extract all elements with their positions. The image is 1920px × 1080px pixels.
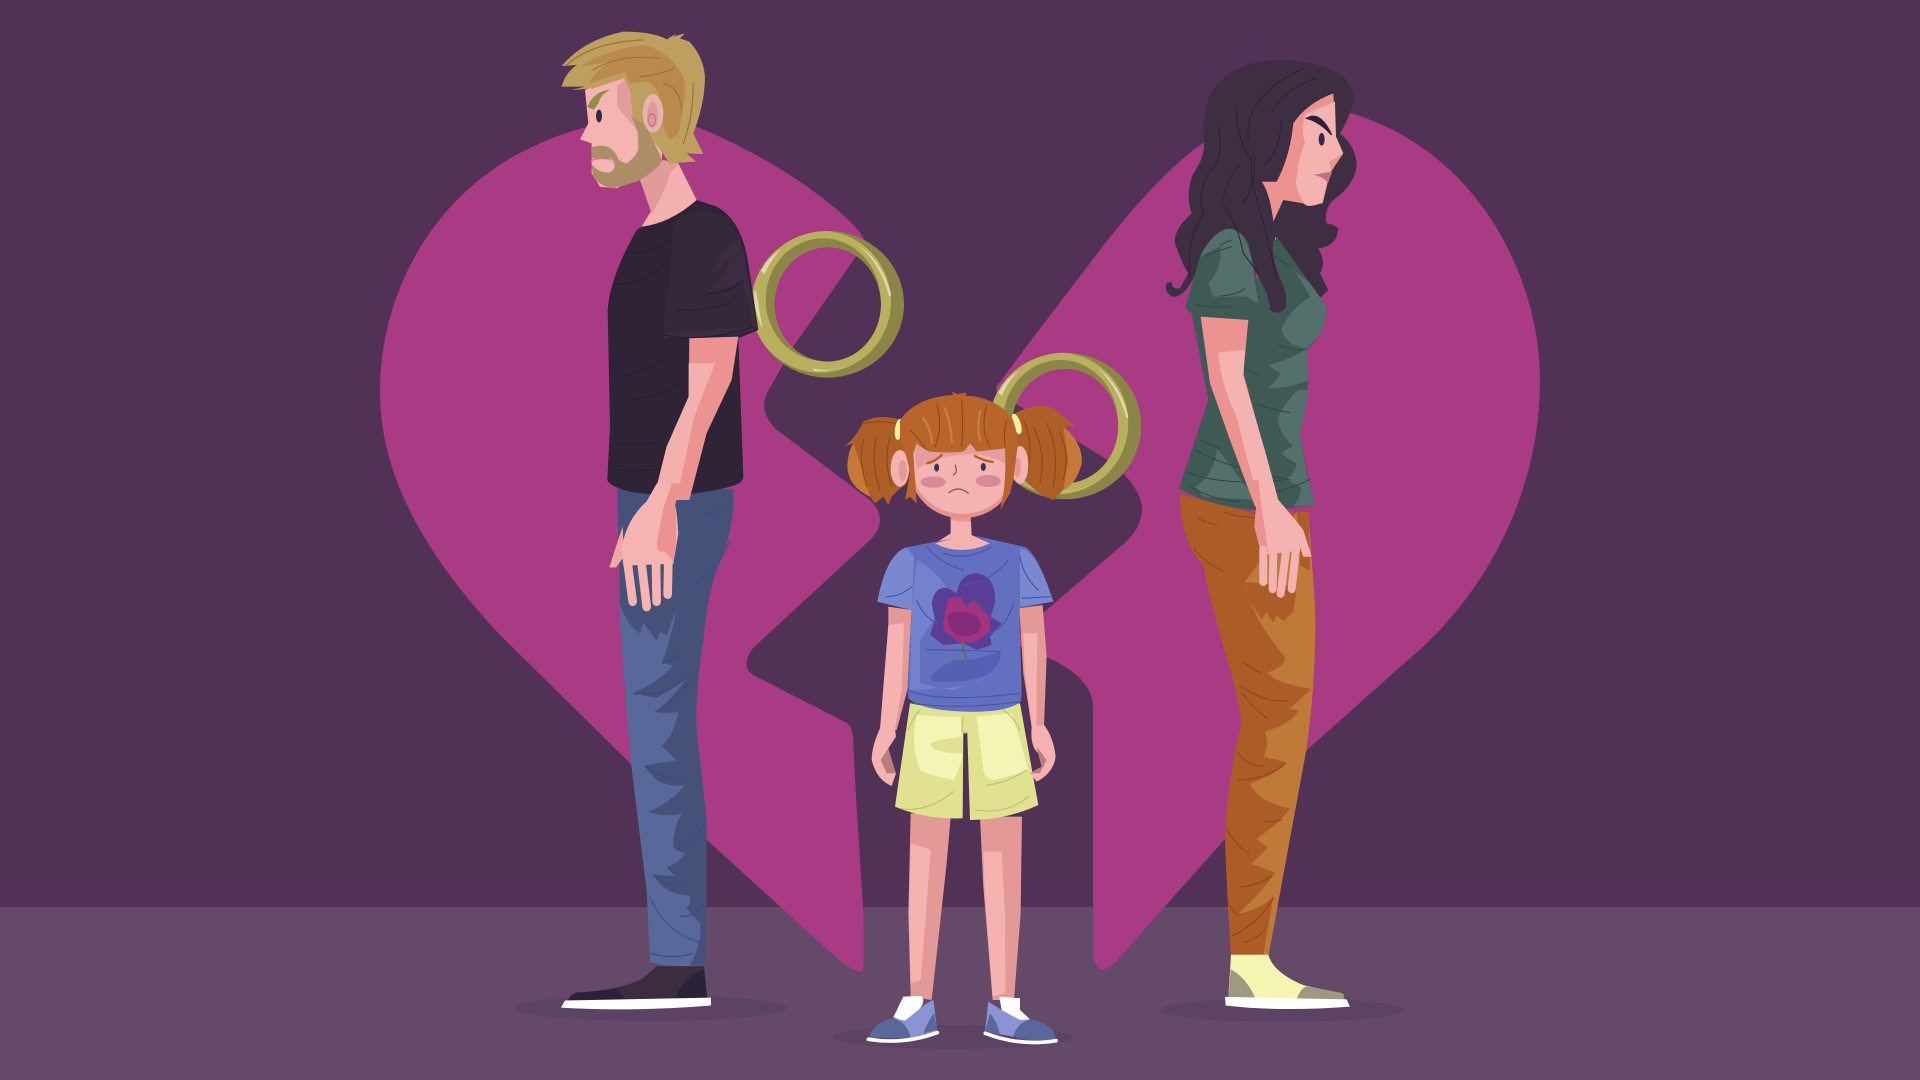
ring highlights xyxy=(754,246,891,371)
ring inner shading xyxy=(766,238,880,361)
woman hair front lock xyxy=(1189,67,1317,313)
woman lips xyxy=(1313,172,1332,183)
child hair xyxy=(900,392,1018,510)
wedding ring left xyxy=(748,228,908,381)
man eye xyxy=(596,110,602,122)
man head xyxy=(562,32,705,188)
man neck xyxy=(640,160,697,227)
man jeans xyxy=(617,489,733,966)
child eyes xyxy=(934,463,986,472)
heart right half xyxy=(996,111,1540,970)
woman eye xyxy=(1319,133,1325,146)
child hair ties xyxy=(894,413,1024,440)
child ears xyxy=(891,446,1028,487)
child head xyxy=(845,392,1082,518)
child neck xyxy=(935,515,990,552)
woman eyebrow xyxy=(1307,116,1332,135)
man shirt xyxy=(607,200,758,495)
man arm xyxy=(653,337,738,500)
child arms xyxy=(880,605,1047,730)
heart left half xyxy=(380,120,880,972)
woman shoe xyxy=(1225,955,1350,1009)
man eyebrow xyxy=(587,90,611,110)
woman neck xyxy=(1262,182,1313,247)
child face xyxy=(912,440,1012,518)
woman face xyxy=(1277,93,1343,206)
ring inner shading xyxy=(1004,360,1118,417)
child hands xyxy=(872,725,1056,786)
man shoe xyxy=(561,966,711,1009)
woman shirt xyxy=(1179,228,1327,510)
man face shadow xyxy=(617,77,662,160)
wedding ring right xyxy=(992,352,1142,500)
woman xyxy=(1166,60,1357,1009)
child nose and mouth xyxy=(949,465,968,493)
woman pants xyxy=(1180,494,1315,957)
man mouth xyxy=(591,158,612,161)
floor shadow child xyxy=(833,1025,1073,1049)
floor xyxy=(0,907,1920,1080)
man face xyxy=(580,72,663,188)
man hand xyxy=(609,484,682,607)
man hair xyxy=(562,32,705,163)
floor shadow woman xyxy=(1160,998,1406,1022)
ring highlights xyxy=(998,368,1128,493)
man ear xyxy=(643,94,663,133)
man xyxy=(561,32,758,1009)
woman hair back xyxy=(1166,60,1357,299)
child shirt xyxy=(877,536,1053,712)
shirt flower xyxy=(930,573,1002,680)
child blush xyxy=(921,475,1001,488)
man beard xyxy=(591,117,663,188)
broken heart xyxy=(380,111,1540,972)
child legs xyxy=(908,813,1022,1000)
child xyxy=(845,392,1082,1043)
child left pigtail xyxy=(845,417,910,505)
woman hand xyxy=(1250,480,1312,594)
child shoes xyxy=(868,996,1056,1043)
woman arm xyxy=(1201,317,1280,507)
floor shadow man xyxy=(513,995,787,1021)
child right pigtail xyxy=(1015,406,1082,500)
child shorts xyxy=(895,703,1038,820)
child eyebrows xyxy=(927,455,993,463)
